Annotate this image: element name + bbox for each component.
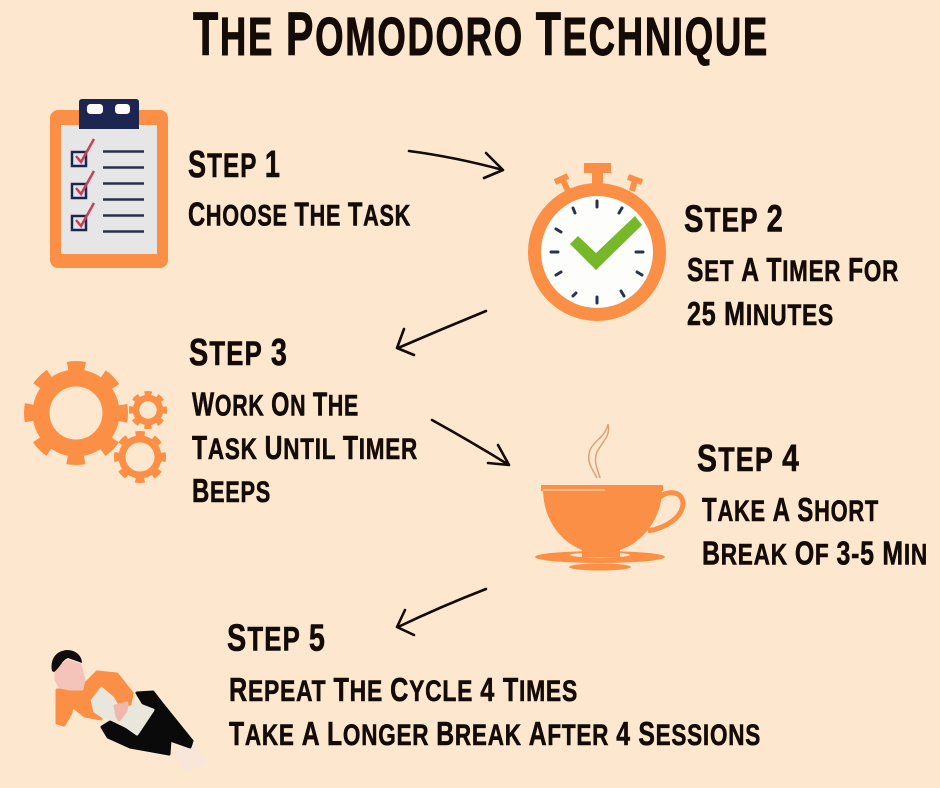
icon: stopwatch with check mark	[528, 163, 666, 321]
panel: step 5	[52, 618, 761, 770]
arrow: step 4 to step 5	[397, 589, 486, 635]
text: work on the task until timer beeps: TASK UNTIL TIMER	[192, 429, 418, 466]
panel: step 3	[30, 332, 418, 509]
heading: step 3: STEP 3	[189, 332, 288, 374]
panel: step 1	[50, 99, 411, 268]
text: set a timer for 25 minutes	[687, 251, 899, 332]
arrow: step 1 to step 2	[409, 151, 503, 178]
panel: step 2	[528, 163, 899, 332]
heading: step 4: STEP 4	[697, 438, 800, 480]
icon: gears	[30, 367, 164, 480]
heading: step 1: STEP 1	[188, 144, 281, 186]
text: repeat the cycle and longer break: TAKE A LONGER BREAK AFTER 4 SESSIONS	[229, 715, 761, 752]
arrow: step 2 to step 3	[397, 311, 486, 355]
panel: step 4	[535, 424, 928, 572]
text: repeat the cycle and longer break	[229, 671, 761, 752]
text: work on the task until timer beeps: WORK ON THE	[192, 386, 359, 422]
text: work on the task until timer beeps	[192, 386, 418, 509]
title: THE POMODORO TECHNIQUE	[193, 0, 769, 68]
heading: step 2: STEP 2	[684, 198, 784, 240]
text: work on the task until timer beeps: BEEPS	[192, 472, 271, 509]
text: set a timer for 25 minutes: 25 MINUTES	[687, 295, 834, 332]
text: choose the task: CHOOSE THE TASK	[188, 196, 411, 232]
text: repeat the cycle and longer break: REPEAT THE CYCLE 4 TIMES	[229, 671, 578, 708]
arrow: step 3 to step 4	[432, 420, 509, 465]
text: take a short break of 3-5 min: BREAK OF 3-5 MIN	[702, 534, 928, 572]
heading: step 5: STEP 5	[227, 618, 326, 660]
icon: clipboard with checklist	[50, 99, 168, 268]
icon: person lying down	[52, 650, 206, 770]
text: set a timer for 25 minutes: SET A TIMER FOR	[687, 251, 899, 288]
text: take a short break of 3-5 min	[702, 491, 928, 572]
text: take a short break of 3-5 min: TAKE A SHORT	[702, 491, 879, 528]
icon: cup of coffee	[535, 424, 683, 570]
